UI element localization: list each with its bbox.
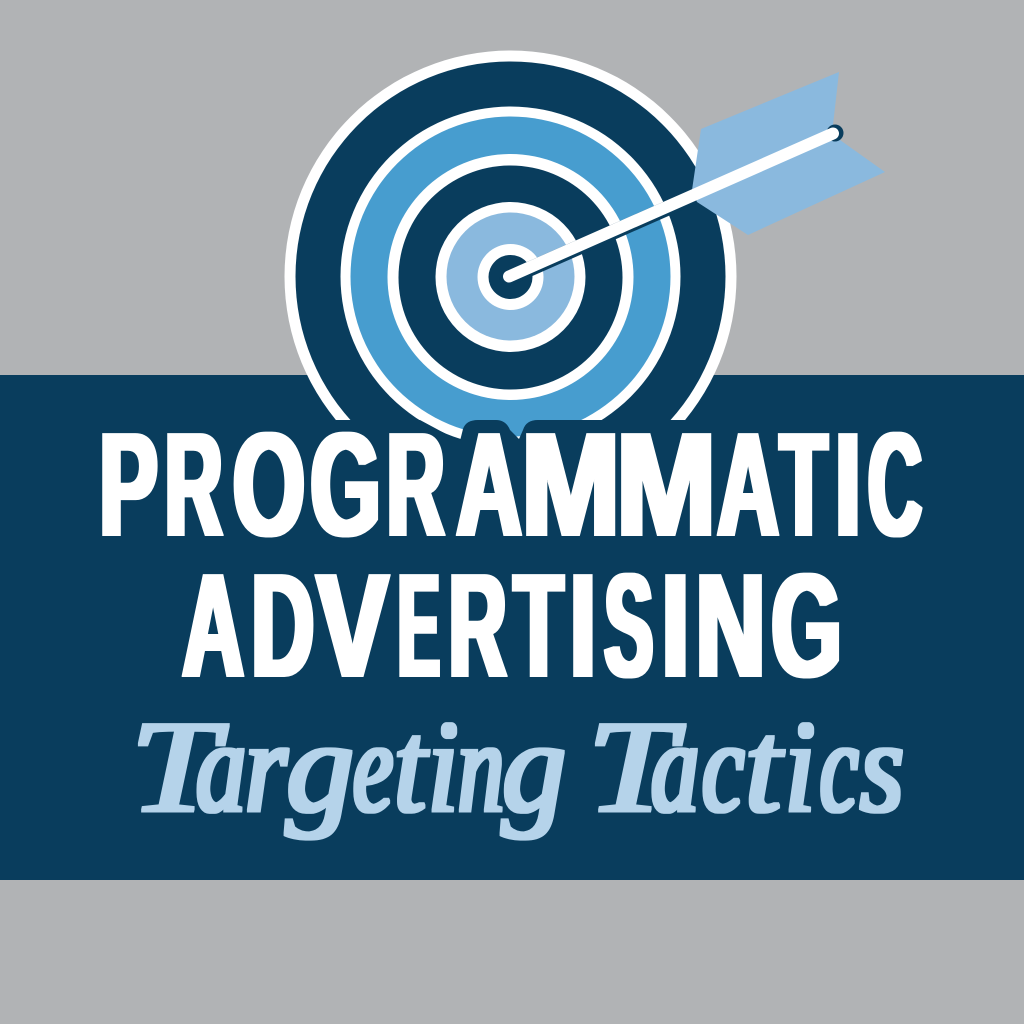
title: Programmatic: R — [387, 402, 444, 568]
title: Advertising: D — [251, 544, 314, 708]
subtitle: Targeting Tactics: s — [860, 693, 904, 840]
title: Advertising: A — [182, 544, 244, 708]
title: Advertising: S — [605, 544, 653, 708]
title: Programmatic: A — [456, 402, 522, 568]
title: Programmatic: A — [718, 402, 779, 568]
title: Advertising: R — [449, 544, 506, 708]
subtitle: Targeting Tactics: g — [286, 693, 354, 840]
subtitle: Targeting Tactics: a — [651, 693, 699, 840]
title: Advertising: E — [398, 544, 439, 708]
subtitle: Targeting Tactics: c — [702, 693, 744, 840]
subtitle: Targeting Tactics: e — [353, 693, 393, 840]
navy halo cutting off the target behind the title — [0, 420, 1024, 600]
title: Advertising: T — [514, 544, 563, 708]
title: Advertising: I — [570, 544, 596, 708]
subtitle: Targeting Tactics: a — [196, 693, 246, 840]
title: Programmatic: M — [616, 402, 716, 568]
subtitle: Targeting Tactics: n — [458, 693, 504, 840]
title: Programmatic: M — [521, 402, 620, 568]
subtitle: Targeting Tactics: t — [745, 693, 784, 840]
title: Programmatic: I — [835, 402, 861, 568]
navy title band — [0, 375, 1024, 880]
subtitle: Targeting Tactics: i — [428, 693, 458, 840]
subtitle: Targeting Tactics: t — [394, 693, 429, 840]
title: Programmatic: G — [310, 402, 381, 568]
title: Programmatic: P — [99, 402, 158, 568]
subtitle: Targeting Tactics: T — [130, 693, 228, 840]
icon: arrow — [507, 72, 885, 279]
title: Advertising: V — [316, 544, 388, 708]
subtitle: Targeting Tactics: c — [820, 693, 858, 840]
subtitle: Targeting Tactics: T — [587, 693, 685, 840]
icon: bullseye target — [284, 50, 736, 502]
title: Programmatic: R — [165, 402, 222, 568]
subtitle: Targeting Tactics: g — [502, 693, 566, 840]
title: Programmatic: T — [780, 402, 827, 568]
title: Advertising: N — [696, 544, 765, 708]
subtitle: Targeting Tactics: i — [785, 693, 815, 840]
title: Programmatic: O — [233, 402, 305, 568]
title: Advertising: G — [771, 544, 842, 708]
subtitle: Targeting Tactics: r — [245, 693, 288, 840]
title: Advertising: I — [662, 544, 689, 708]
text: C — [868, 402, 922, 568]
